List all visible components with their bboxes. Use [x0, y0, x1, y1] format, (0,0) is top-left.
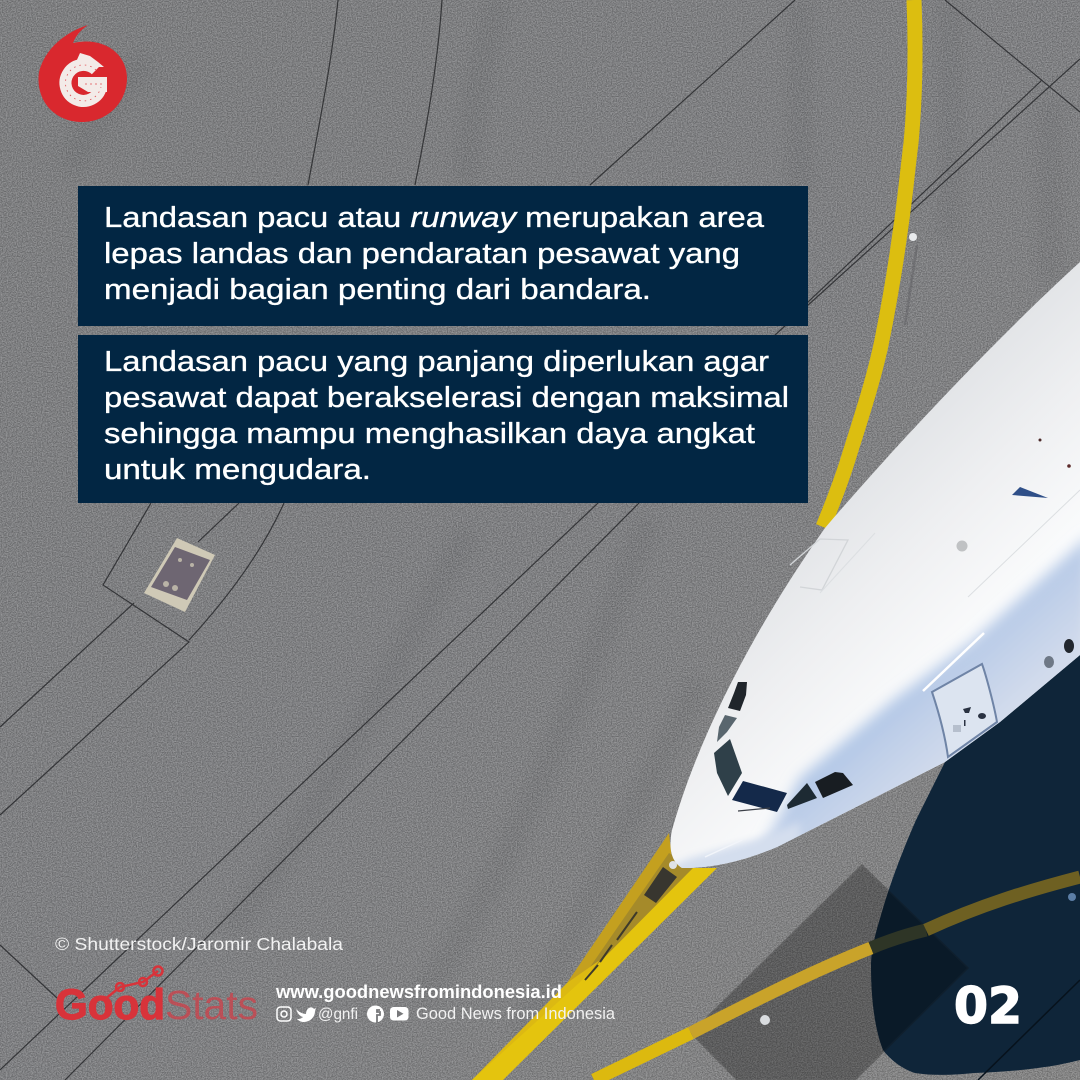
paragraph 1: lepas landas dan pendaratan pesawat yang [104, 238, 740, 270]
paragraph 1: Landasan pacu atau runway merupakan area [104, 202, 765, 234]
paragraph 2: Landasan pacu yang panjang diperlukan agar [104, 346, 769, 378]
yellow taxi line, upper [823, 0, 915, 527]
wing shadow [871, 652, 1080, 1075]
icon: instagram [277, 1007, 291, 1021]
yellow taxi lines, lower [472, 833, 717, 1080]
paragraph 2: untuk mengudara. [104, 454, 371, 486]
blue reflection on fuselage [676, 535, 1080, 868]
handle: @gnfi [318, 1006, 358, 1023]
website: www.goodnewsfromindonesia.id [275, 982, 562, 1002]
icon: twitter [296, 1007, 316, 1022]
text panel 2 [78, 335, 808, 503]
fuselage hatch [790, 539, 848, 590]
paragraph 1 [104, 202, 765, 306]
crew door [932, 664, 997, 757]
GoodStats logo [55, 966, 258, 1029]
social row [277, 1004, 616, 1023]
nose light strip [705, 840, 742, 857]
paragraph 2 [104, 346, 789, 486]
logo G emblem [65, 53, 107, 101]
shadow studs and seams [760, 893, 1080, 1080]
GoodStats logo: Stats [165, 982, 258, 1028]
page name: Good News from Indonesia [416, 1004, 616, 1023]
paragraph 2: pesawat dapat berakselerasi dengan maksimal [104, 382, 789, 414]
manhole cover [144, 538, 215, 612]
photo credit: © Shutterstock/Jaromir Chalabala [55, 934, 343, 954]
passenger window marks [956, 438, 1074, 668]
lower yellow curved line [594, 877, 1080, 1080]
icon: facebook [367, 1006, 384, 1023]
text panel 1 [78, 186, 808, 326]
airplane fuselage [670, 262, 1080, 868]
page number: 02 [954, 977, 1022, 1035]
cockpit windows [714, 682, 853, 812]
fuselage panel lines [820, 490, 1080, 597]
dark pavement square [691, 865, 968, 1080]
tow marks [644, 867, 677, 903]
door handles [953, 707, 986, 732]
GoodStats logo: Good [55, 981, 165, 1029]
paragraph 1: menjadi bagian penting dari bandara. [104, 274, 651, 306]
paragraph 2: sehingga mampu menghasilkan daya angkat [104, 418, 755, 450]
blue antenna [1012, 487, 1048, 498]
runway stud [909, 233, 917, 241]
white reflective strip [923, 633, 984, 691]
icon: youtube [390, 1007, 408, 1020]
logo: GNFI [39, 25, 127, 122]
